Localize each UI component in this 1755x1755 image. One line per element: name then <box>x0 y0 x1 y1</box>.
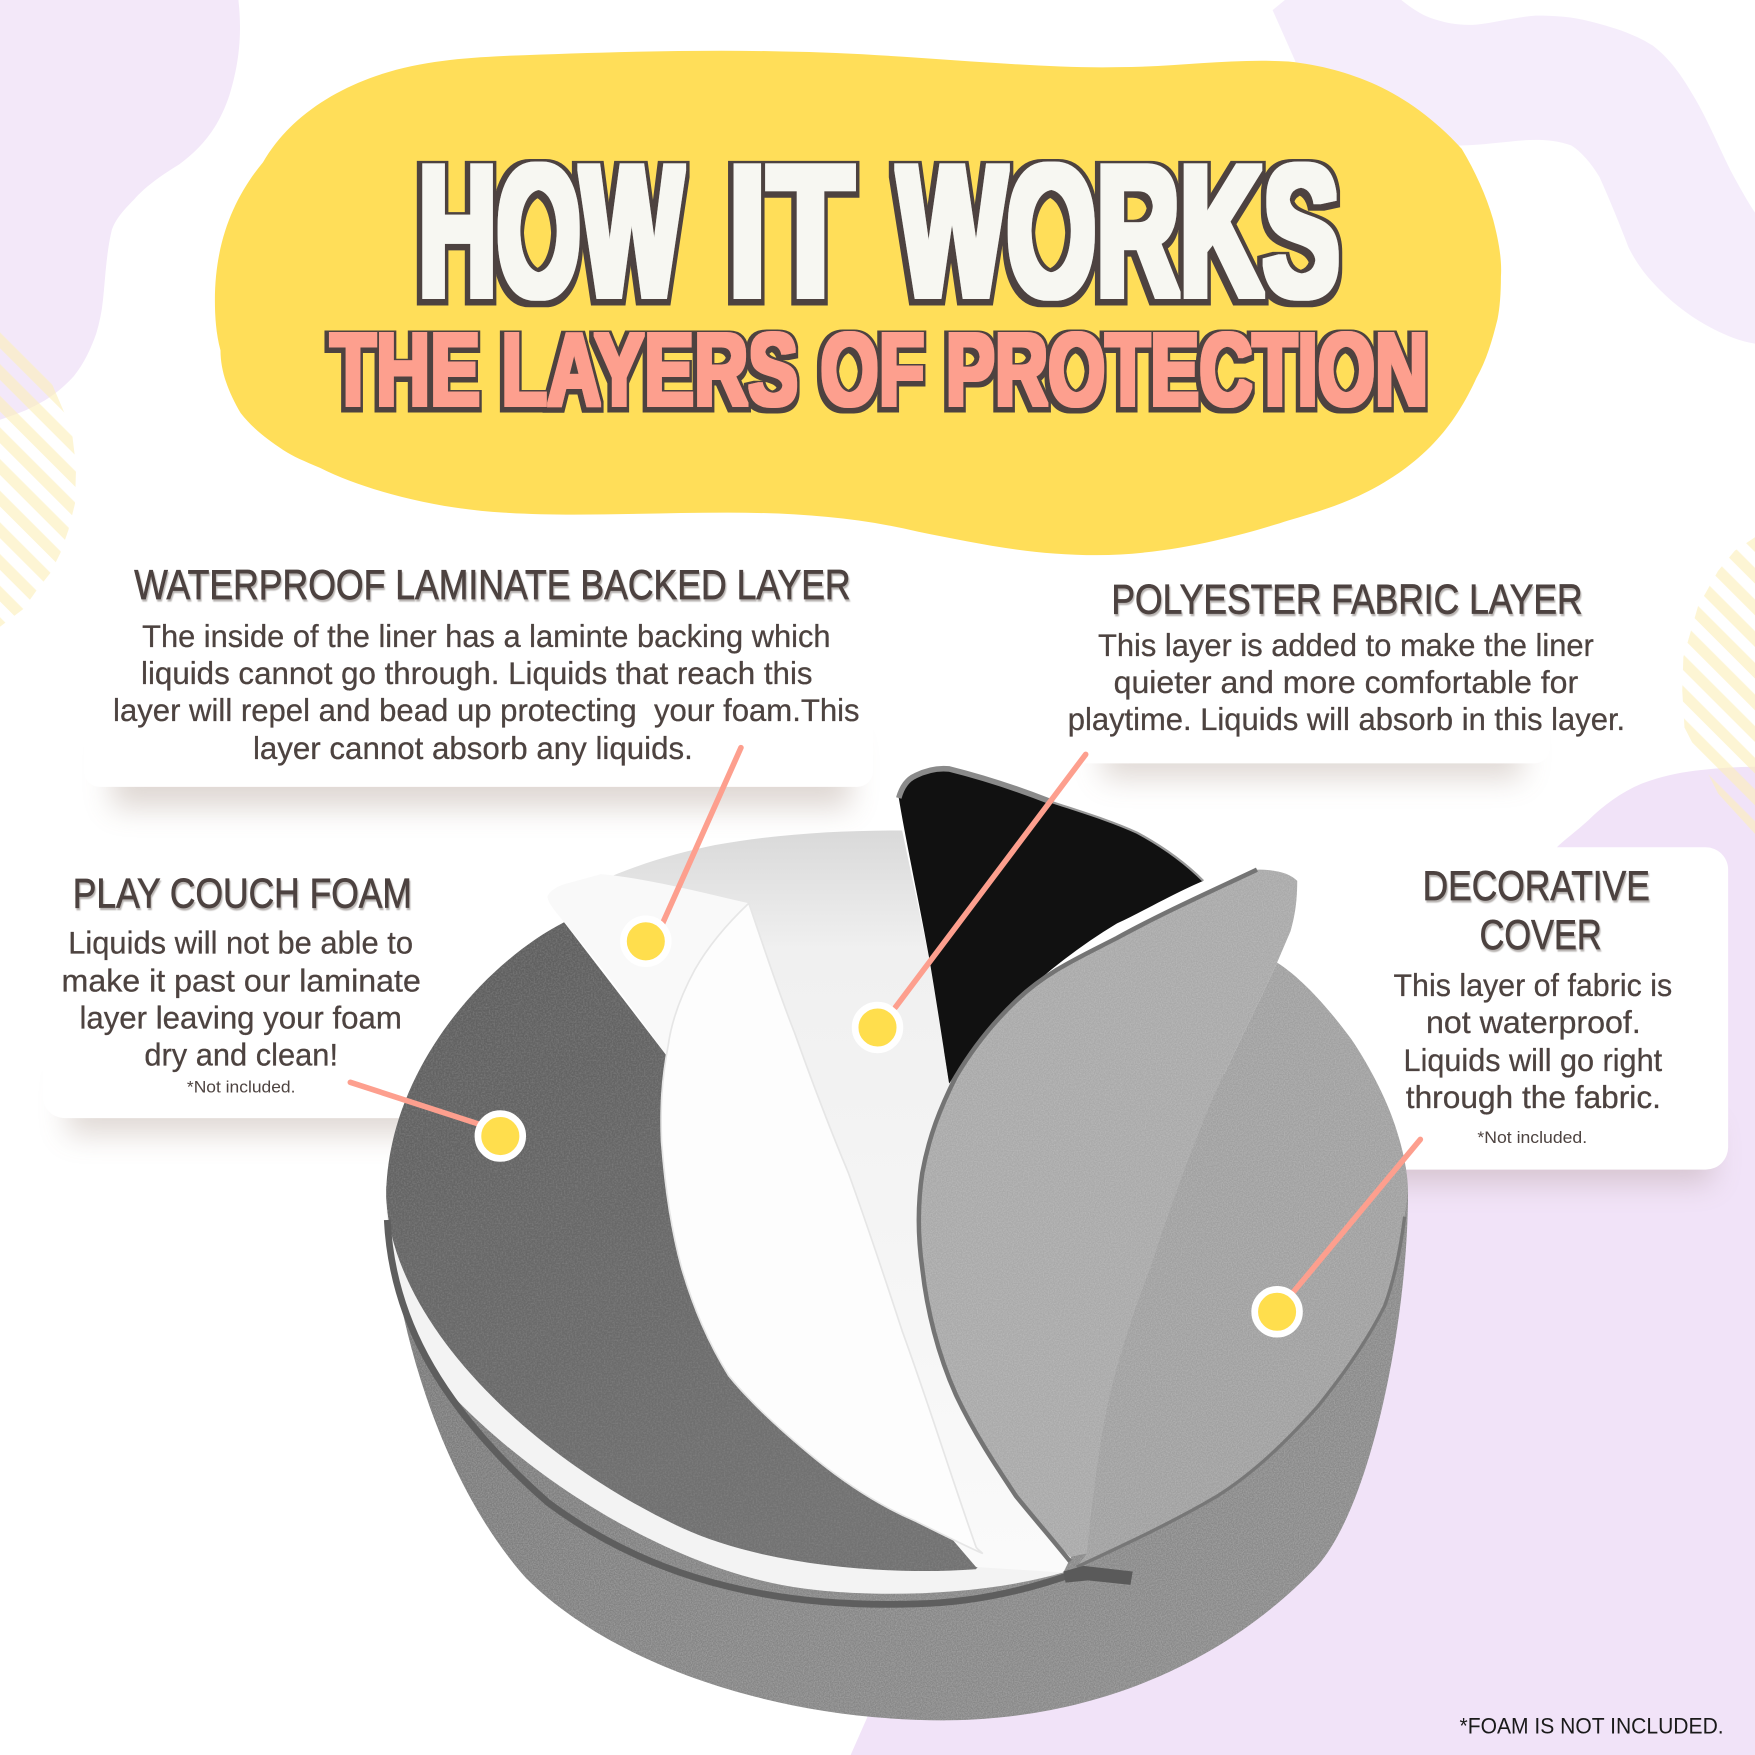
card: polyester layer <box>1063 571 1550 779</box>
text block: play couch foam: dry and clean! <box>144 1038 338 1073</box>
subtitle: LAYERS <box>501 312 798 427</box>
text block: decorative cover: *Not included. <box>1477 1128 1587 1147</box>
text block: play couch foam <box>62 871 421 1096</box>
title: IT <box>728 126 854 335</box>
card: decorative cover <box>1231 847 1728 1183</box>
text block: play couch foam: *Not included. <box>187 1077 295 1096</box>
text block: decorative cover <box>1393 863 1672 1147</box>
text block: play couch foam: layer leaving your foam <box>79 1001 402 1036</box>
cover petal <box>919 870 1297 1557</box>
text block: waterproof laminate backed layer: The inside of the liner has a laminte backing which <box>142 619 830 654</box>
heading: decorative cover: DECORATIVE <box>1423 863 1650 909</box>
black polyester layer <box>899 769 1203 1083</box>
footnote: *FOAM IS NOT INCLUDED. <box>1460 1714 1724 1739</box>
decorative wave: top right <box>1273 0 1755 344</box>
left liner flap <box>547 874 749 1058</box>
callout: foam <box>350 1082 523 1158</box>
text block: polyester fabric layer: This layer is added to make the liner <box>1098 628 1594 663</box>
subtitle: OF <box>820 312 925 427</box>
text block: decorative cover: Liquids will go right <box>1404 1043 1662 1078</box>
text block: waterproof laminate backed layer <box>113 562 860 766</box>
title: HOW <box>419 126 683 335</box>
text block: polyester fabric layer: quieter and more comfortable for <box>1114 665 1578 700</box>
cushion body <box>386 1007 1408 1720</box>
text block: waterproof laminate backed layer: layer will repel and bead up protecting your foam.This <box>113 693 860 728</box>
white rim band <box>386 1198 1074 1594</box>
callout: polyester layer <box>855 754 1086 1050</box>
card: waterproof layer <box>84 565 873 808</box>
text block: play couch foam: make it past our laminate <box>62 964 421 999</box>
bottom zipper track <box>387 1220 1077 1604</box>
title: WORKS <box>898 126 1340 335</box>
cover right zipper <box>1077 1217 1405 1567</box>
stripes: left <box>0 323 76 627</box>
text block: decorative cover: not waterproof. <box>1426 1005 1641 1040</box>
text block: polyester fabric layer <box>1068 576 1625 737</box>
cover petal zipper <box>919 870 1257 1561</box>
seam of polyester layer <box>1050 801 1203 881</box>
white liner petal <box>661 903 983 1554</box>
text block: waterproof laminate backed layer: layer cannot absorb any liquids. <box>253 731 693 766</box>
heading: decorative cover <box>1423 863 1650 958</box>
cover right section <box>1077 963 1408 1567</box>
subtitle <box>330 312 1428 427</box>
decorative blob: top left <box>0 0 240 420</box>
decorative blob: bottom right <box>851 767 1755 1755</box>
heading: waterproof: WATERPROOF LAMINATE BACKED LAYER <box>134 562 851 608</box>
yellow title blob <box>215 51 1501 555</box>
callout: decorative cover <box>1255 1139 1420 1334</box>
text block: decorative cover: through the fabric. <box>1406 1080 1661 1115</box>
cushion photo illustration <box>386 769 1408 1720</box>
text block: waterproof laminate backed layer: liquids cannot go through. Liquids that reach this <box>141 656 813 691</box>
foam top <box>386 922 1007 1571</box>
subtitle: THE <box>330 312 480 427</box>
heading: foam: PLAY COUCH FOAM <box>73 871 412 917</box>
heading: decorative cover: COVER <box>1480 912 1602 958</box>
stripes: right <box>1682 537 1755 834</box>
zipper pull <box>1063 1566 1133 1585</box>
callout: waterproof layer <box>623 748 741 964</box>
heading: polyester: POLYESTER FABRIC LAYER <box>1111 576 1583 622</box>
text block: decorative cover: This layer of fabric is <box>1393 968 1672 1003</box>
title <box>419 126 1340 335</box>
back liner <box>601 830 1070 1573</box>
subtitle: PROTECTION <box>946 312 1428 427</box>
text block: play couch foam: Liquids will not be able to <box>68 926 413 961</box>
text block: polyester fabric layer: playtime. Liquids will absorb in this layer. <box>1068 702 1625 737</box>
grey edge of polyester layer <box>899 769 1050 801</box>
card: foam <box>43 862 490 1135</box>
